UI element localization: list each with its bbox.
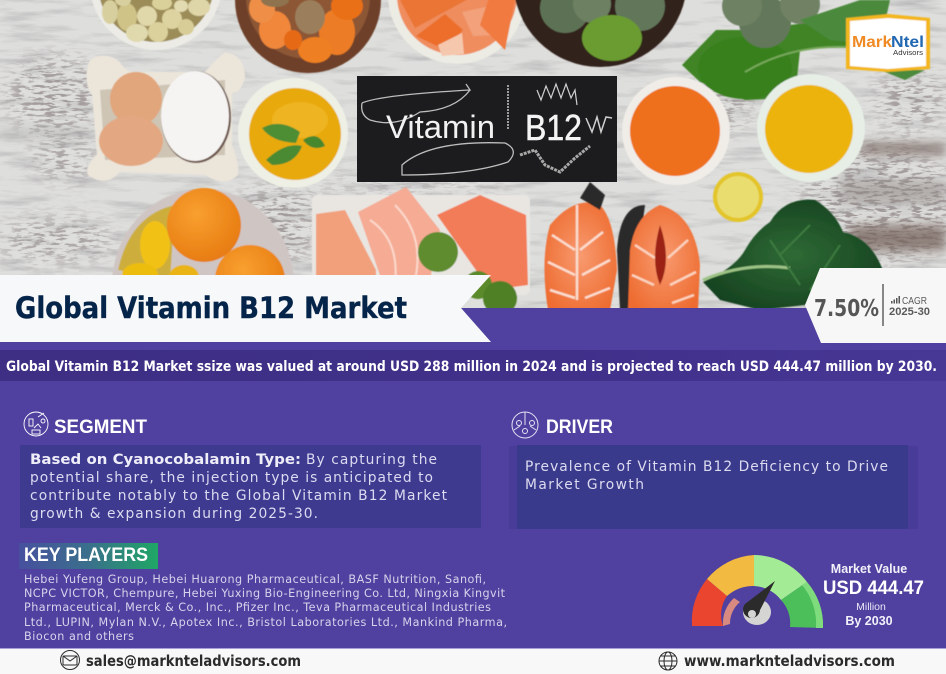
key players heading: KEY PLAYERS bbox=[24, 545, 148, 566]
market value: USD 444.47 bbox=[823, 577, 924, 599]
bowl of nuts bbox=[90, 0, 222, 50]
chalkboard sign: Vitamin bbox=[386, 109, 495, 145]
lemon slice bbox=[713, 172, 763, 222]
logo text: Ntel bbox=[891, 34, 924, 51]
footer bar bbox=[0, 648, 946, 674]
driver heading bbox=[512, 412, 613, 438]
panel: segment bbox=[20, 445, 481, 528]
segment heading bbox=[24, 412, 147, 438]
website: www.marknteladvisors.com bbox=[684, 652, 895, 670]
gauge needle bbox=[743, 581, 775, 618]
fruit bowl bbox=[112, 188, 294, 381]
title: Global Vitamin B12 Market bbox=[15, 291, 407, 325]
dark bowl with broccoli bbox=[513, 0, 687, 67]
panel: segment: contribute notably to the Global Vitamin B12 Market bbox=[30, 488, 448, 504]
panel: segment: Based on Cyanocobalamin Type: bbox=[30, 452, 301, 468]
spinach leaves bbox=[703, 200, 884, 310]
market value: By 2030 bbox=[845, 614, 893, 628]
icon: driver circle bbox=[512, 412, 538, 438]
icon: globe bbox=[659, 652, 677, 670]
market value: Market Value bbox=[831, 562, 907, 576]
icon: segment globe bbox=[24, 412, 48, 436]
yellow oil bowl bbox=[757, 74, 865, 182]
plate with salmon fillets and broccoli bbox=[312, 187, 530, 315]
icon: small bar chart bbox=[891, 296, 900, 304]
panel: driver: Prevalence of Vitamin B12 Deficiency to Drive bbox=[525, 459, 888, 475]
CAGR badge bbox=[805, 268, 946, 343]
salmon steaks bbox=[544, 182, 700, 310]
orange oil bowl bbox=[622, 77, 730, 185]
CAGR label: CAGR bbox=[902, 295, 927, 307]
panel: driver: Market Growth bbox=[525, 477, 644, 493]
gauge: dark green segment bbox=[781, 582, 823, 628]
driver heading: DRIVER bbox=[546, 416, 613, 438]
gauge bbox=[692, 555, 823, 628]
chalkboard sign bbox=[357, 76, 617, 182]
panel: segment: growth & expansion during 2025-30. bbox=[30, 506, 318, 522]
CAGR period: 2025-30 bbox=[889, 306, 930, 318]
key players list: NCPC VICTOR, Chempure, Hebei Yuxing Bio-Engineering Co. Ltd, Ningxia Kingvit bbox=[24, 587, 506, 600]
purple background bbox=[0, 308, 946, 648]
bowl of salmon cubes bbox=[388, 0, 526, 64]
key players list: Ltd., LUPIN, Mylan N.V., Apotex Inc., Bristol Laboratories Ltd., Mankind Pharma, bbox=[24, 616, 507, 629]
panel: driver bbox=[509, 445, 918, 529]
logo text bbox=[852, 34, 924, 57]
market value: Million bbox=[856, 601, 886, 613]
gauge: red segment bbox=[692, 579, 727, 626]
wooden bowl of carrots bbox=[235, 0, 381, 73]
email address: sales@marknteladvisors.com bbox=[86, 652, 301, 670]
key players list bbox=[24, 573, 507, 643]
market value bbox=[823, 562, 924, 628]
yellow oil bowl with mint bbox=[238, 78, 348, 188]
key players list: Biocon and others bbox=[24, 630, 134, 643]
logo badge background bbox=[846, 14, 930, 72]
key players list: Hebei Yufeng Group, Hebei Huarong Pharmaceutical, BASF Nutrition, Sanofi, bbox=[24, 573, 486, 586]
panel: segment: By capturing the bbox=[306, 452, 437, 468]
title banner bbox=[0, 275, 491, 342]
logo text: Advisors bbox=[893, 50, 924, 57]
egg tray bbox=[86, 52, 245, 182]
CAGR value: 7.50% bbox=[814, 296, 879, 322]
gauge: light green segment bbox=[754, 555, 807, 600]
summary strip bbox=[0, 350, 946, 381]
segment heading: SEGMENT bbox=[54, 416, 147, 438]
logo text: Mark bbox=[852, 34, 892, 51]
panel: segment: potential share, the injection type is anticipated to bbox=[30, 470, 433, 486]
photo: vitamin B12 food flat lay bbox=[0, 0, 946, 381]
gauge hub bbox=[743, 599, 771, 625]
gauge: yellow segment bbox=[707, 555, 754, 596]
key players list: Pharmaceutical, Merck & Co., Inc., Pfizer Inc., Teva Pharmaceutical Industries bbox=[24, 601, 491, 614]
icon: email bbox=[60, 650, 80, 670]
chalkboard sign: B12 bbox=[525, 107, 582, 148]
spinach leaf and broccoli bbox=[682, 0, 925, 100]
